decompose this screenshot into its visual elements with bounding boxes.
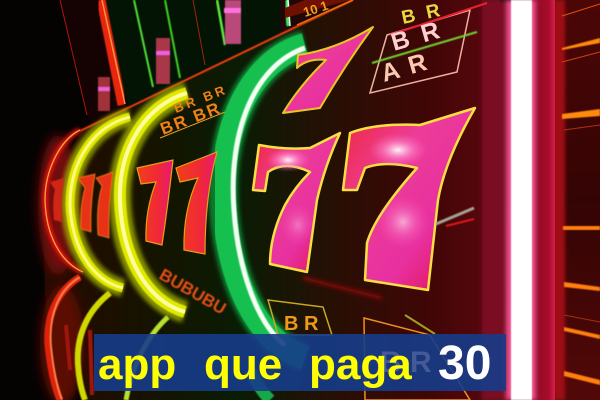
BAR panel lower left [268, 300, 332, 335]
caption words [98, 337, 491, 390]
pillars with pink rings [98, 0, 241, 111]
BAR symbols below third reel: BUBUBU [156, 265, 229, 318]
caption banner: B R [380, 346, 432, 379]
top edge neon line [80, 0, 353, 131]
lucky seven: right large [343, 108, 475, 290]
lucky seven: small top [283, 27, 373, 113]
reflected reel bands [48, 277, 270, 400]
BAR symbols on third reel: BR BR [158, 98, 224, 139]
reel band: yellow one [70, 117, 130, 288]
number plate at top [285, 0, 353, 25]
BAR panel upper right [370, 0, 487, 93]
white neon post [482, 0, 555, 400]
lucky seven: middle large [253, 133, 340, 272]
upper back wall with neon strips [60, 0, 353, 125]
red sevens on first reel [50, 178, 64, 222]
BAR panel lower left: B R [284, 313, 319, 335]
BAR panel upper right: B R [400, 0, 445, 29]
BAR panel lower right [364, 315, 470, 400]
orange sevens on third reel [137, 152, 217, 254]
caption banner [94, 334, 506, 391]
reel band: red [45, 130, 83, 272]
machine body [42, 0, 512, 400]
BAR symbols on third reel: BR BR [172, 82, 230, 116]
left reel red glow [38, 135, 84, 400]
caption words: paga [309, 340, 412, 389]
caption words: 30 [438, 337, 491, 390]
lower neon streaks [303, 208, 474, 298]
reel band: yellow two [120, 93, 187, 312]
caption words: app [98, 340, 176, 389]
right cabinet section [553, 0, 600, 400]
orange sevens on second reel [78, 172, 113, 238]
reel band: green [223, 45, 305, 358]
caption words: que [204, 340, 282, 389]
BAR panel upper right: A R [378, 48, 432, 88]
BAR panel upper right: B R [388, 16, 446, 57]
BAR symbols on third reel [158, 82, 230, 139]
